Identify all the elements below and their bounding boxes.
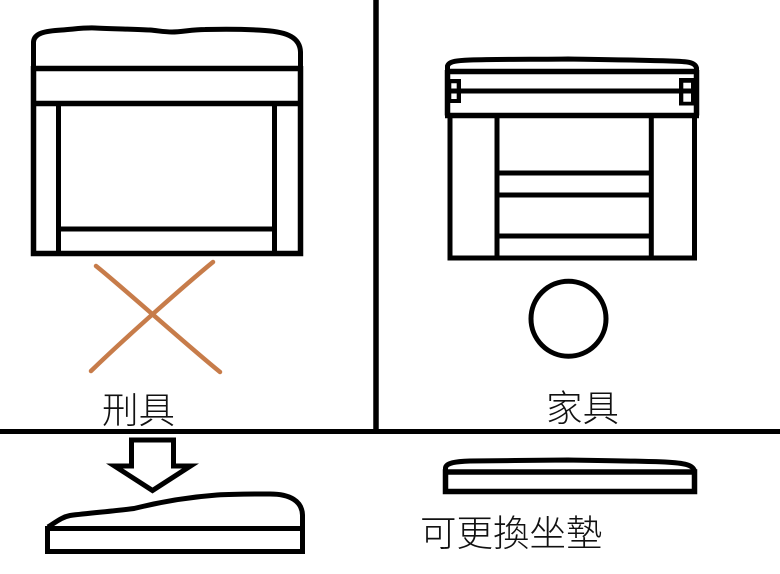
- right joint clip: [679, 78, 695, 106]
- label: furniture: 家具: [546, 388, 619, 429]
- lower rails: [497, 173, 651, 236]
- icon: orange cross mark: [91, 262, 220, 372]
- seat cushion, uneven top: [34, 28, 300, 68]
- cushion base: [48, 528, 302, 552]
- horizontal divider: [0, 429, 780, 434]
- inner leg edges and lower rail: [58, 104, 275, 253]
- legs and base: [450, 116, 694, 258]
- icon: approval circle: [531, 281, 606, 356]
- vertical divider: [373, 0, 379, 431]
- panel: fixed uneven cushion: [48, 494, 302, 552]
- thin seat cushion: [448, 59, 696, 72]
- cushion top: [48, 494, 302, 528]
- cushion base: [446, 472, 694, 492]
- label: replaceable seat cushion: 可更換坐墊: [420, 513, 602, 554]
- arrow: down: [114, 440, 190, 490]
- label: torture device: 刑具: [102, 390, 175, 431]
- cushion top: [446, 460, 694, 472]
- panel: replaceable cushion: [446, 460, 694, 492]
- mid seat line: [450, 88, 694, 94]
- left joint clip: [450, 79, 461, 103]
- panel: torture device stool: [31, 28, 303, 254]
- seat frame and legs: [31, 66, 303, 254]
- seat frame: [445, 70, 699, 116]
- panel: furniture stool: [445, 59, 699, 258]
- inner legs: [497, 116, 651, 258]
